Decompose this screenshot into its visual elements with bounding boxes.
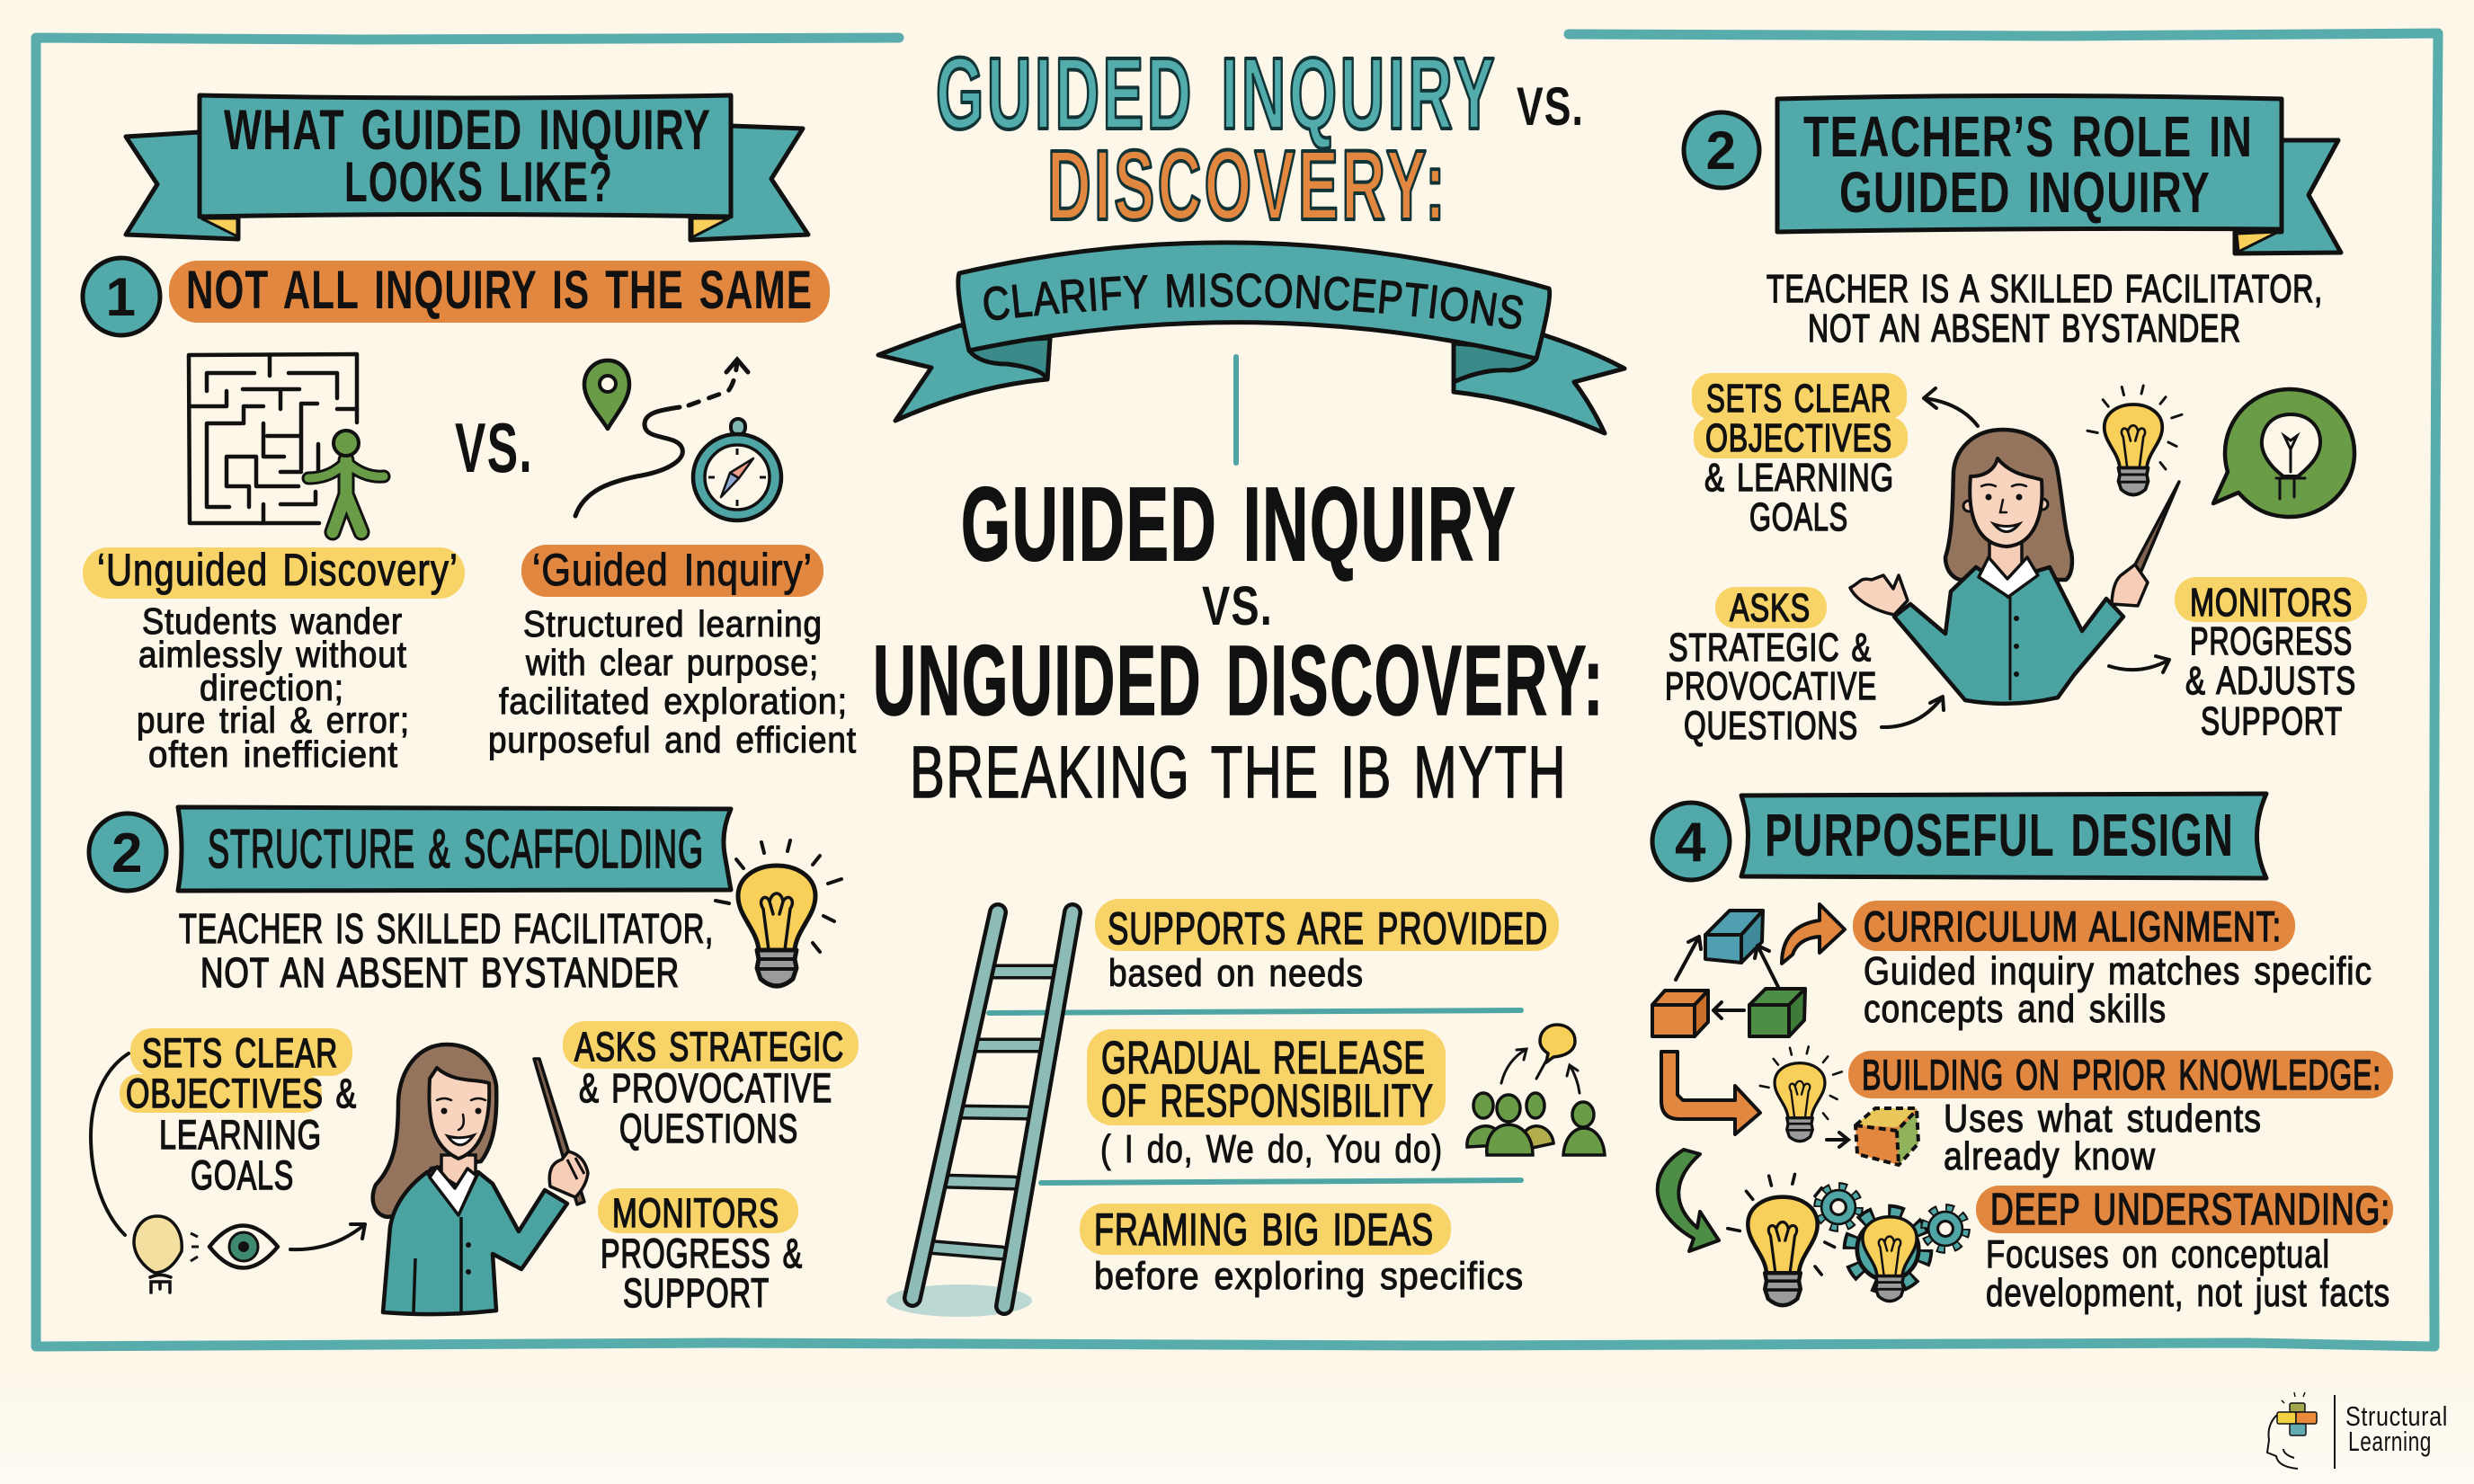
icon: light bulb [716,840,841,986]
icon: compass [693,419,781,520]
heading: unguided discovery: UNGUIDED DISCOVERY: [873,626,1605,736]
icon: connected cubes [1652,911,1805,1036]
label: curriculum alignment: CURRICULUM ALIGNMENT: [1864,902,2282,950]
icon: scaffolding ladder [886,912,1072,1317]
callout: monitors progress: & ADJUSTS [2185,659,2356,703]
label: building on prior knowledge: already know [1944,1134,2156,1178]
callout: asks strategic questions: QUESTIONS [1684,704,1858,748]
logo: structural learning: Structural [2345,1400,2448,1432]
panel: centre title [873,37,1627,1317]
item: supports are provided: based on needs [1108,952,1364,995]
label: building on prior knowledge: Uses what students [1944,1097,2262,1141]
curved ribbon: clarify misconceptions: CLARIFY MISCONCEPTIONS [983,273,1523,329]
arrow from questions [1882,697,1944,727]
item: gradual release of responsibility: GRADUAL RELEASE [1101,1032,1426,1083]
number badge 2: 2 [111,822,144,884]
item: gradual release of responsibility: ( I do, We do, You do) [1100,1127,1443,1171]
callout: asks strategic questions: PROVOCATIVE [1665,664,1877,708]
text: teacher is a skilled facilitator [1767,267,2323,351]
ribbon heading: structure and scaffolding: STRUCTURE & SCAFFOLDING [208,819,704,879]
main title: VS. [1517,76,1584,137]
connector curve [91,1053,129,1235]
panel: structure and scaffolding [89,807,859,1316]
icon: gears and bulbs [1728,1174,1964,1305]
text: unguided description: often inefficient [148,733,398,775]
callout: asks strategic questions: STRATEGIC & [1669,626,1872,670]
label: guided inquiry: ‘Guided Inquiry’ [532,545,813,595]
text: guided description: facilitated exploration; [499,680,848,722]
label: curriculum alignment: Guided inquiry matches specific [1864,949,2372,993]
callout: sets clear objectives: SETS CLEAR [1706,377,1891,421]
label: building on prior knowledge [1848,1051,2393,1178]
callout: monitors progress and support: SUPPORT [623,1270,770,1316]
callout: sets clear objectives: GOALS [191,1152,294,1198]
panel: purposeful design [1652,794,2393,1315]
icon: light bulb [1760,1046,1842,1142]
callout: monitors progress and support [598,1188,803,1316]
panel: teacher's role [1665,95,2367,748]
label: deep understanding: Focuses on conceptual [1986,1232,2330,1276]
text: teacher is skilled facilitator: NOT AN ABSENT BYSTANDER [200,949,680,996]
callout: sets clear objectives: LEARNING [159,1112,322,1158]
icon: light bulb [2087,386,2182,494]
text: unguided description: pure trial & error; [137,699,410,741]
callout: asks strategic questions [563,1021,859,1151]
label: curriculum alignment: concepts and skills [1864,987,2167,1031]
item: framing big ideas: FRAMING BIG IDEAS [1094,1204,1434,1255]
heading: not all inquiry is the same: NOT ALL INQUIRY IS THE SAME [186,260,813,320]
vertical divider [1233,357,1239,463]
icon: group with idea balloon [1467,1025,1605,1155]
number badge 2 [1684,112,1759,188]
divider lines [989,1010,1521,1183]
number badge 1 [83,258,160,335]
icon: maze [189,354,357,523]
icon: dashed knowledge cube [1827,1108,1918,1165]
ribbon heading: what guided inquiry looks like [126,95,808,240]
text: teacher is skilled facilitator [179,905,714,996]
label: deep understanding [1976,1186,2393,1315]
callout: sets clear objectives: SETS CLEAR [142,1030,338,1076]
icon: map pin [584,360,629,429]
text: teacher is skilled facilitator: TEACHER IS SKILLED FACILITATOR, [179,905,714,952]
callout: monitors progress and support: MONITORS [612,1190,779,1236]
number badge 1: 1 [106,267,137,327]
item: supports are provided: SUPPORTS ARE PROVIDED [1108,903,1548,954]
heading: not all inquiry is the same [169,260,830,323]
number badge 4 [1652,803,1730,880]
ribbon heading: teacher's role [1777,95,2341,253]
callout: monitors progress: MONITORS [2190,581,2353,625]
text: unguided description: aimlessly without [138,634,407,675]
callout: asks strategic questions: QUESTIONS [619,1106,798,1151]
callout: sets clear objectives: & LEARNING [1704,456,1894,500]
ribbon heading: teacher's role: TEACHER’S ROLE IN [1803,104,2253,169]
text: unguided description [137,600,410,775]
callout: monitors progress and support: PROGRESS & [601,1231,803,1276]
text: unguided description: Students wander [142,600,403,642]
callout: monitors progress: SUPPORT [2201,699,2343,743]
vs text: VS. [1202,575,1273,636]
vs label: VS. [455,408,533,487]
icon: lost person [308,431,384,532]
main title [936,37,1584,241]
callout: sets clear objectives: GOALS [1749,495,1848,539]
callout: asks strategic questions: ASKS [1730,586,1811,630]
main title: DISCOVERY: [1047,130,1448,241]
icon: speech bubble with bulb [2213,389,2354,517]
number badge 2: 2 [1706,120,1737,181]
logo: structural learning: Learning [2348,1426,2432,1457]
item: framing big ideas: before exploring specifics [1094,1255,1524,1298]
ribbon heading: purposeful design: PURPOSEFUL DESIGN [1765,802,2234,869]
callout: asks strategic questions: ASKS STRATEGIC [574,1024,844,1070]
arrow to objectives [1924,388,1978,426]
callout: asks strategic questions: & PROVOCATIVE [579,1065,832,1111]
callout: monitors progress [2175,577,2367,743]
logo: structural learning [2267,1392,2448,1469]
panel: what guided inquiry looks like [83,95,857,775]
ribbon heading: what guided inquiry looks like: WHAT GUIDED INQUIRY [224,99,711,162]
label: curriculum alignment [1853,901,2372,1031]
arrow to teacher [290,1224,365,1249]
number badge 4: 4 [1675,812,1707,874]
main title: GUIDED INQUIRY [936,37,1498,150]
item: framing big ideas [1080,1204,1524,1298]
callout: sets clear objectives [120,1028,357,1198]
icon: orange curved arrow [1782,904,1845,964]
callout: asks strategic questions [1665,586,1877,748]
illustration: teacher with pointer [373,1044,588,1314]
callout: sets clear objectives: OBJECTIVES & [126,1071,357,1116]
heading: guided inquiry: GUIDED INQUIRY [961,466,1517,582]
text: guided description: purposeful and efficient [488,719,857,760]
number badge 2 [89,813,166,891]
text: unguided description: direction; [200,667,344,708]
subheading: breaking the IB myth: BREAKING THE IB MYTH [910,732,1567,813]
text: teacher is a skilled facilitator: NOT AN ABSENT BYSTANDER [1808,307,2241,351]
ribbon heading: what guided inquiry looks like: LOOKS LIKE? [344,151,613,214]
text: guided description: Structured learning [523,603,823,644]
item: gradual release of responsibility [1087,1029,1446,1171]
arrow to monitors [2109,656,2169,672]
callout: sets clear objectives [1692,373,1908,539]
item: supports are provided [1095,899,1559,995]
icon: winding path with arrow [575,360,748,516]
item: gradual release of responsibility: OF RESPONSIBILITY [1101,1075,1434,1126]
ribbon heading: purposeful design [1741,794,2266,878]
icon: orange elbow arrow [1661,1052,1760,1134]
ribbon heading: teacher's role: GUIDED INQUIRY [1839,160,2211,225]
callout: monitors progress: PROGRESS [2190,619,2353,663]
icon: eye [209,1226,278,1267]
icon: green curved arrow [1658,1150,1719,1251]
ribbon heading: structure and scaffolding [178,807,731,891]
text: guided description [488,603,857,760]
icon: pale bulb [134,1216,199,1293]
callout: sets clear objectives: OBJECTIVES [1705,416,1892,460]
text: guided description: with clear purpose; [525,642,819,683]
illustration: teacher with pointer [1850,430,2179,704]
curved ribbon: clarify misconceptions [876,240,1627,435]
label: unguided discovery: ‘Unguided Discovery’ [97,545,458,595]
